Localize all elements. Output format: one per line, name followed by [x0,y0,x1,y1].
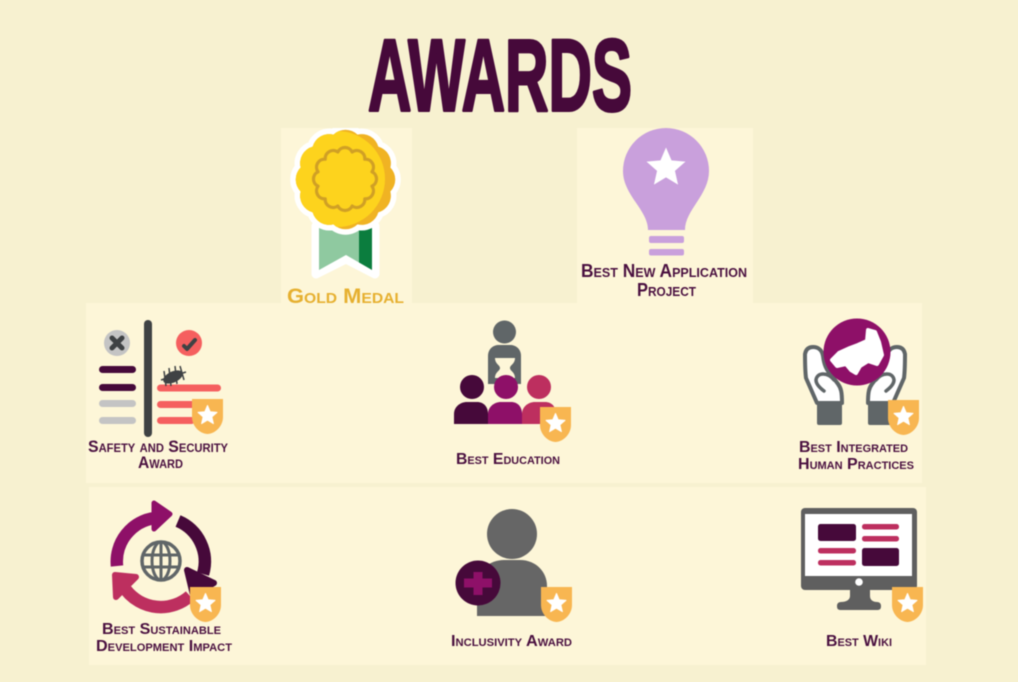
label: safety and security award [88,437,228,472]
title: AWARDS [368,18,632,132]
label: best new application project: Project [637,280,696,300]
award: safety and security [88,320,228,472]
icon: recycling arrows with globe [115,503,214,607]
label: safety and security award: Safety and Security [88,437,228,456]
award: best education [454,320,571,468]
label: best education: Best Education [456,451,560,468]
label: best integrated human practices: Best Integrated [799,439,908,456]
panel: row one background [86,303,922,483]
label: best wiki: Best Wiki [826,633,892,650]
award: inclusivity [451,509,572,650]
badge: shield [892,587,923,622]
icon: monitor [801,508,917,610]
award: best sustainable development impact [96,503,232,655]
panel: gold medal [287,128,404,304]
icon: hands holding globe [805,318,905,425]
label: best sustainable development impact: Best Sustainable [102,621,221,638]
award: best wiki [801,508,923,650]
label: best sustainable development impact [96,621,232,655]
label: best integrated human practices [798,439,914,473]
award: best integrated human practices [798,318,919,473]
panel: row two background [89,487,926,665]
badge: shield [541,587,572,622]
badge: shield [190,587,221,622]
icon: person with plus [456,509,547,616]
label: gold medal: Gold Medal [287,285,404,308]
label: best new application project: Best New Application [581,261,747,281]
label: best new application project [581,261,747,300]
panel: best new application project [577,128,753,303]
label: safety and security award: Award [138,453,183,472]
icon: teacher and students [454,320,556,424]
label: best integrated human practices: Human Practices [798,456,914,473]
icon: gold medal [296,130,395,274]
label: best sustainable development impact: Development Impact [96,638,232,655]
icon: light bulb [623,128,709,256]
badge: shield [888,400,919,435]
infographic canvas [88,36,924,652]
badge: shield [192,399,223,434]
label: inclusivity award: Inclusivity Award [451,633,572,650]
icon: safety checklist [99,320,221,437]
badge: shield [540,407,571,442]
